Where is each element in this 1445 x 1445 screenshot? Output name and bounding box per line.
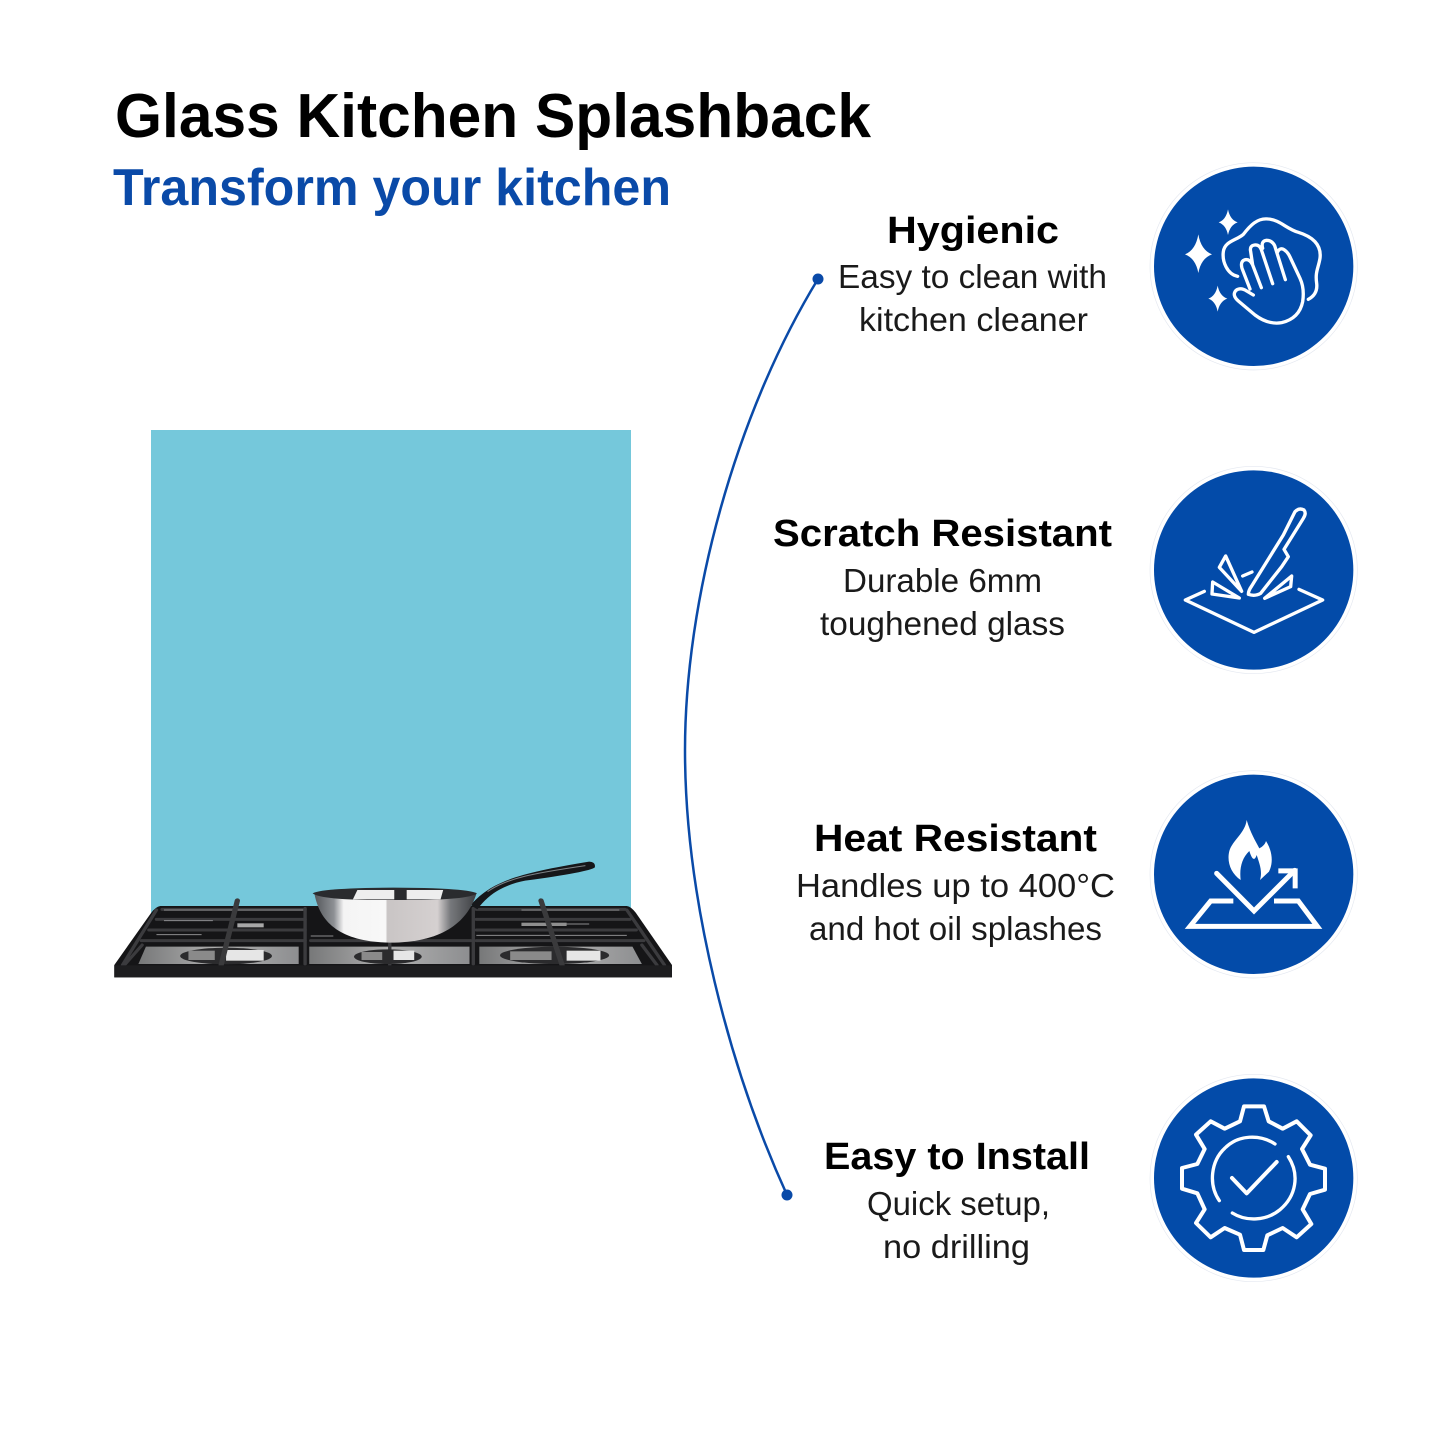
angled grate arms bbox=[221, 901, 562, 965]
feature: scratch resistant text: Scratch Resistant bbox=[773, 513, 1112, 555]
feature: heat resistant text: Heat Resistant bbox=[814, 818, 1097, 860]
connector curve bbox=[685, 274, 824, 1200]
feature: easy to install text: Easy to Install bbox=[824, 1136, 1090, 1178]
pan rim bbox=[313, 888, 477, 900]
title: Glass Kitchen Splashback bbox=[115, 82, 871, 151]
pan interior highlights bbox=[353, 890, 443, 899]
feature: hygienic text: kitchen cleaner bbox=[859, 301, 1088, 338]
feature: heat resistant text: Handles up to 400°C bbox=[796, 867, 1115, 904]
feature: scratch resistant text bbox=[773, 513, 1112, 642]
icon: knife scratching glass bbox=[1150, 466, 1357, 674]
pan body bbox=[314, 894, 476, 943]
feature: hygienic text bbox=[838, 210, 1107, 338]
feature: heat resistant text: and hot oil splashes bbox=[809, 910, 1102, 947]
feature: scratch resistant text: toughened glass bbox=[820, 605, 1065, 642]
feature: hygienic text: Hygienic bbox=[887, 210, 1059, 252]
front edge bbox=[114, 965, 672, 977]
icon: gear with check mark bbox=[1150, 1074, 1357, 1282]
gas hob with pan bbox=[114, 862, 672, 977]
feature: scratch resistant text: Durable 6mm bbox=[843, 562, 1042, 599]
steel burner wells bbox=[138, 947, 642, 964]
icon: hand wiping with sparkles bbox=[1150, 163, 1357, 370]
grate bars bbox=[123, 908, 664, 965]
centre burner bbox=[354, 949, 422, 964]
feature: easy to install text bbox=[824, 1136, 1090, 1265]
icon: flame on heat-resistant surface bbox=[1150, 771, 1357, 978]
right burner bbox=[500, 923, 609, 964]
feature: easy to install text: Quick setup, bbox=[867, 1185, 1050, 1222]
pan handle highlight bbox=[488, 866, 585, 892]
feature: heat resistant text bbox=[796, 818, 1115, 947]
subtitle: Transform your kitchen bbox=[113, 159, 671, 217]
left burner bbox=[180, 923, 272, 964]
hob body bbox=[114, 906, 672, 977]
feature: hygienic text: Easy to clean with bbox=[838, 258, 1107, 295]
feature: easy to install text: no drilling bbox=[883, 1228, 1030, 1265]
pan handle bbox=[471, 862, 595, 909]
glass splashback panel bbox=[151, 430, 631, 915]
